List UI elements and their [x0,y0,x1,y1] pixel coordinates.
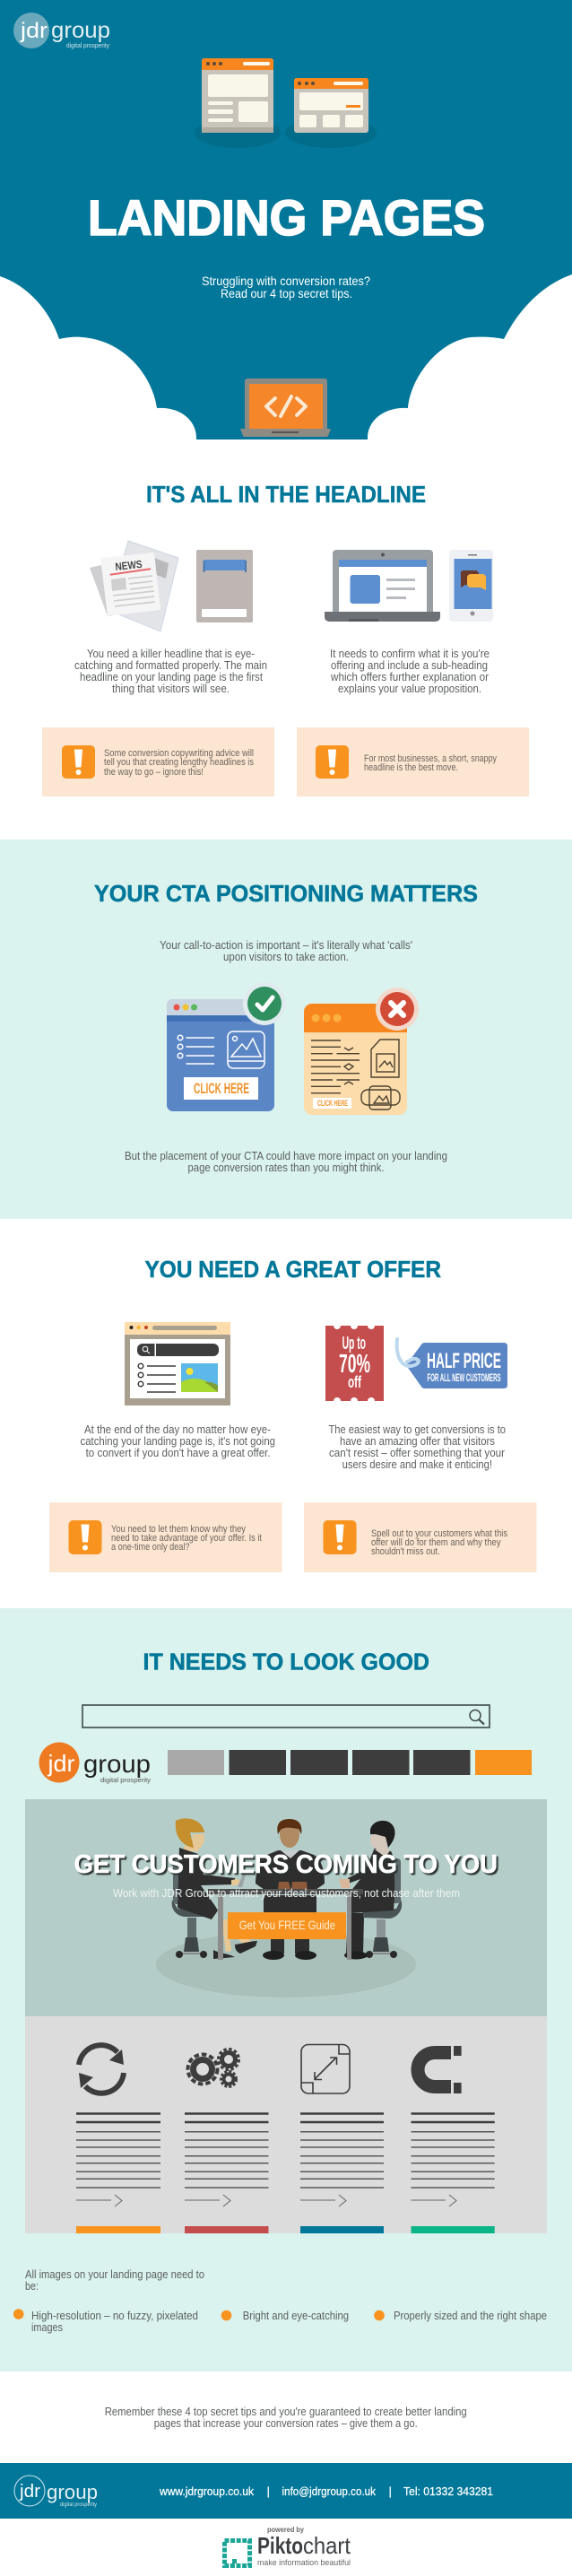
person: man in centre [256,1819,325,1960]
text: left column: headline on your landing page is the first [80,670,263,683]
branding: piktochart: powered by [267,2525,304,2534]
subtitle [202,274,370,300]
panel: your CTA positioning matters [0,840,572,1219]
text: closing remark: pages that increase your conversion rates – give them a go. [154,2416,418,2430]
illustration: good CTA browser: CLICK HERE [194,1080,249,1097]
icon: 70% off coupon: 70% [339,1350,370,1379]
heading: YOU NEED A GREAT OFFER [145,1258,441,1283]
text: left column [74,647,267,695]
text: left column: You need a killer headline that is eye- [87,647,255,660]
column 3 [300,2113,384,2233]
icon: refresh [79,2045,124,2093]
contact details: Tel: 01332 343281 [403,2485,493,2498]
logo: jdr group orange: digital prosperity [100,1776,151,1784]
callout: left tip: tell you that creating lengthy headlines is [104,757,254,768]
navigation bar [168,1750,532,1775]
panel: it's all in the headline [42,483,529,796]
bullet: high resolution: High-resolution – no fuzzy, pixelated [31,2309,198,2322]
bullet: high resolution [13,2309,198,2334]
text: closing remark [105,2405,467,2430]
text: left column: catching your landing page is, it's not going [81,1434,275,1448]
callout: left tip: Some conversion copywriting advice will [104,748,254,759]
text: right column: which offers further explanation or [330,670,490,683]
panel: hero header [0,0,572,439]
text: outro: page conversion rates than you might think. [188,1161,384,1174]
icon: newspapers: NEWS [115,558,143,573]
text: intro: Your call-to-action is important – it's literally what 'calls' [160,938,412,952]
search bar [82,1705,490,1727]
text: left column: thing that visitors will see. [112,682,230,695]
callout: left tip: the way to go – ignore this! [104,767,204,778]
text: left column [81,1423,275,1459]
text: right column: offering and include a sub-heading [331,658,488,672]
text: right column: The easiest way to get conversions is to [328,1423,506,1436]
hero headline: GET CUSTOMERS COMING TO YOU [74,1850,498,1879]
hero subheadline: Work with JDR Group to attract your ideal customers, not chase after them [113,1886,460,1900]
callout: right tip: headline is the best move. [364,762,458,773]
logo: jdr group white: digital prosperity [60,2502,98,2508]
logo: jdr group white: jdr [19,2482,40,2502]
bullet: bright: Bright and eye-catching [243,2309,349,2322]
icon: two browser windows [195,58,377,148]
cloud: left [0,276,196,439]
illustration: good CTA browser [167,982,286,1111]
logo: jdr group orange [39,1742,151,1784]
text: right column: users desire and make it enticing! [342,1458,492,1471]
callout: left tip [49,1502,282,1572]
icon: book [196,550,253,622]
callout: left tip: need to take advantage of your offer. Is it [111,1533,262,1544]
icon: laptop [325,550,440,622]
callout: right tip [304,1502,536,1572]
branding: piktochart: Pikto [257,2532,303,2559]
callout: right tip: offer will do for them and why they [371,1537,501,1548]
logo: jdr group orange: jdr [47,1750,75,1777]
logo: jdr group: digital prosperity [66,41,109,49]
logo: jdr group orange: group [83,1750,151,1778]
logo: jdr group white: group [47,2481,98,2503]
icon: exclamation [316,745,349,779]
icon: magnet [418,2046,462,2093]
contact details: | [389,2485,392,2498]
icon: phone with chat bubbles [449,550,493,622]
icon: half price tag [397,1339,507,1388]
contact details: www.jdrgroup.co.uk [159,2485,254,2498]
text: right column: It needs to confirm what it is you're [330,647,490,660]
text: intro [160,938,412,963]
illustration: three business people at a table [172,1818,402,1960]
text: right column [328,1423,506,1471]
icon: half price tag: HALF PRICE [427,1349,501,1373]
text: right column: have an amazing offer that visitors [340,1434,495,1448]
heading: IT NEEDS TO LOOK GOOD [143,1650,429,1675]
text: images intro: be: [25,2279,39,2293]
heading: IT'S ALL IN THE HEADLINE [146,483,426,508]
icon: newspapers [90,541,178,631]
icon: laptop with code [240,379,331,437]
callout: left tip: a one-time only deal? [111,1542,190,1553]
callout: right tip: shouldn't miss out. [371,1546,440,1557]
feature columns mockup [25,2016,547,2233]
icon: 70% off coupon: Up to [342,1334,366,1353]
icon: 70% off coupon: off [348,1373,362,1391]
text: images intro [25,2267,204,2293]
person: woman [172,1818,257,1959]
icon: exclamation [323,1520,357,1554]
column 1 [76,2113,160,2233]
logo: jdr group white [14,2476,98,2508]
text: closing remark: Remember these 4 top secret tips and you're guaranteed to create better landing [105,2405,467,2418]
cloud: right [368,274,572,439]
branding: piktochart: chart [303,2532,351,2559]
text: intro: upon visitors to take action. [223,950,349,963]
logo: jdr group [13,13,110,49]
text: right column: can't resist – offer something that your [329,1446,506,1459]
contact details [159,2485,493,2498]
title: LANDING PAGES [88,189,485,246]
icon: exclamation [62,745,95,779]
bullet: high resolution: images [31,2320,63,2334]
icon: piktochart mark [224,2540,249,2565]
icon: exclamation [68,1520,102,1554]
contact details: | [267,2485,270,2498]
callout: right tip [297,727,529,796]
icon: gears [188,2049,238,2086]
contact details: info@jdrgroup.co.uk [282,2485,376,2498]
icon: browser window with search [125,1322,230,1405]
panel: you need a great offer [49,1258,536,1572]
illustration: bad CTA browser: CLICK HERE [317,1099,348,1108]
column 2 [185,2113,269,2233]
text: right column [330,647,490,695]
subtitle: Read our 4 top secret tips. [221,286,352,300]
callout: left tip: You need to let them know why they [111,1524,246,1535]
text: outro: But the placement of your CTA could have more impact on your landing [125,1149,447,1162]
column 4 [411,2113,495,2233]
text: left column: to convert if you don't have a great offer. [86,1446,271,1459]
person: man at right [339,1821,402,1959]
callout: right tip: Spell out to your customers what this [371,1528,507,1539]
bullet: properly sized: Properly sized and the right shape [394,2309,547,2322]
button: free guide [228,1912,346,1939]
icon: half price tag: FOR ALL NEW CUSTOMERS [427,1371,500,1384]
illustration: bad CTA browser [304,988,419,1115]
branding: piktochart: make information beautiful [257,2558,351,2568]
text: outro [125,1149,447,1174]
panel: footer [0,2463,572,2519]
logo: jdr group: group [51,18,110,43]
button: free guide: Get You FREE Guide [239,1918,335,1932]
callout: right tip: For most businesses, a short, snappy [364,753,497,764]
callout: left tip [42,727,274,796]
hero mockup [25,1799,547,2016]
text: images intro: All images on your landing page need to [25,2267,204,2281]
text: left column: At the end of the day no matter how eye- [84,1423,271,1436]
icon: resize [301,2045,350,2093]
table [208,1889,363,1960]
panel: it needs to look good [0,1608,572,2371]
text: left column: catching and formatted properly. The main [74,658,267,672]
heading: YOUR CTA POSITIONING MATTERS [94,882,478,907]
text: right column: explains your value proposition. [338,682,481,695]
branding: piktochart [224,2525,351,2568]
subtitle: Struggling with conversion rates? [202,274,370,288]
logo: jdr group: jdr [20,19,48,43]
icon: 70% off coupon [325,1322,384,1405]
